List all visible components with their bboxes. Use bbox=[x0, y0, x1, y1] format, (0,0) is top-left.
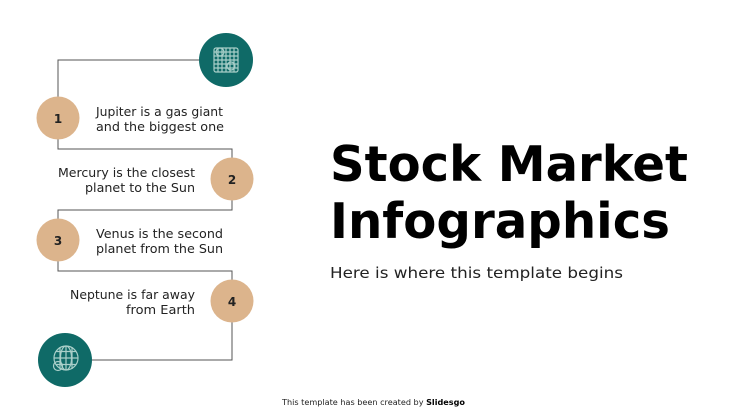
step 4: from Earth bbox=[126, 303, 195, 317]
icon: stock coins bbox=[199, 33, 253, 87]
step 2: planet to the Sun bbox=[85, 181, 195, 195]
icon: globe bbox=[38, 333, 92, 387]
step 4 bbox=[70, 280, 254, 322]
step 3: 3 bbox=[54, 234, 62, 248]
step 1: and the biggest one bbox=[96, 120, 224, 134]
step 1: Jupiter is a gas giant bbox=[95, 105, 223, 119]
step 2: 2 bbox=[228, 173, 236, 187]
step 4: Neptune is far away bbox=[70, 288, 195, 302]
connector line bbox=[58, 60, 232, 360]
step 2 bbox=[58, 158, 254, 200]
credit: This template has been created by Slidesgo bbox=[281, 398, 466, 407]
title: Infographics bbox=[330, 193, 670, 250]
step 1 bbox=[36, 96, 224, 140]
step 4: 4 bbox=[228, 295, 236, 309]
subtitle: Here is where this template begins bbox=[330, 264, 623, 282]
step 3: Venus is the second bbox=[96, 227, 223, 241]
step 3: planet from the Sun bbox=[96, 242, 223, 256]
step 1: 1 bbox=[54, 112, 62, 126]
step 3 bbox=[36, 218, 223, 262]
title: Stock Market bbox=[330, 136, 688, 193]
step 2: Mercury is the closest bbox=[58, 166, 195, 180]
title bbox=[330, 136, 688, 250]
